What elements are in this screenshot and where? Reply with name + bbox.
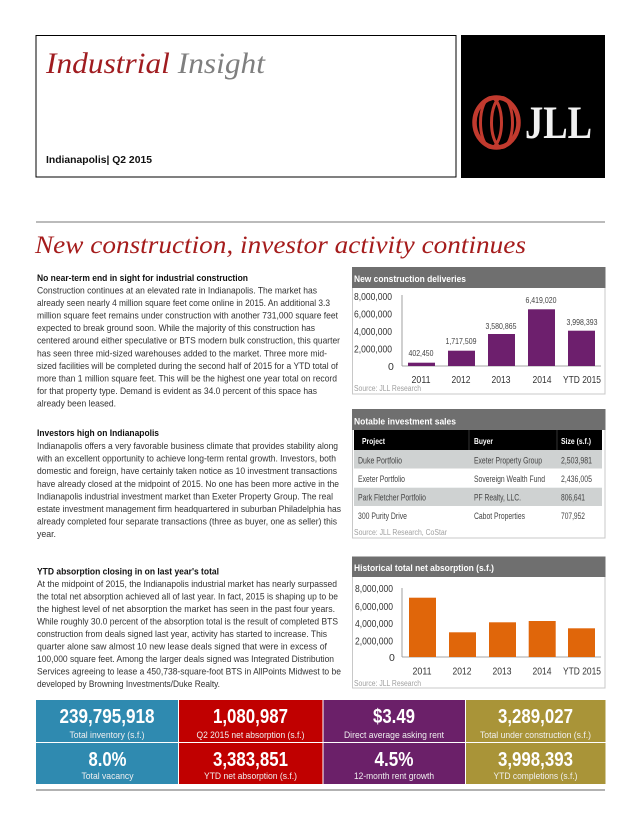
text block: investors: have already closed at the midpoint of 2015. No one has been more active in the [37, 478, 339, 489]
header box [36, 36, 456, 177]
bar chart: deliveries [354, 291, 601, 386]
text block: absorption: YTD absorption closing in on last year's total [37, 566, 219, 576]
stat: under construction: 3,289,027 [498, 706, 573, 728]
text block: investors: estate investment management firm headquartered in suburban Philadelphia has [37, 503, 341, 514]
bar chart: deliveries: 0 [388, 361, 394, 373]
panel: new construction deliveries [352, 267, 606, 394]
stat: YTD net absorption: YTD net absorption (s.f.) [204, 770, 297, 781]
stat: total inventory: 239,795,918 [60, 706, 154, 728]
text block: investors: year. [37, 528, 56, 539]
stat: total inventory [36, 700, 178, 742]
text block: construction: expected to break ground soon. While the majority of this construction has [37, 322, 315, 333]
stat: total inventory: Total inventory (s.f.) [70, 729, 144, 740]
bar chart: deliveries: 4,000,000 [354, 326, 392, 338]
text block: absorption: the highest level of net absorption the market has seen in the past four years. [37, 603, 335, 614]
table: sales: Exeter Property Group [474, 456, 542, 466]
text block: construction: for that property type. Demand is evident as 34.0 percent of this space has [37, 385, 317, 396]
stat: total vacancy: 8.0% [88, 749, 127, 771]
text block: construction: No near-term end in sight for industrial construction [37, 272, 248, 283]
bar chart: absorption: 0 [389, 652, 395, 664]
panel: notable investment sales [352, 409, 606, 538]
bar chart: deliveries: YTD 2015 [563, 374, 601, 386]
bar chart: deliveries: 402,450 [408, 348, 434, 358]
text block: absorption: quarter alone saw almost 10 new lease deals signed that were in excess of [37, 640, 327, 652]
text block: absorption: Services agreeing to lease a 450,738-square-foot BTS in AllPoints Midwest to be [37, 666, 341, 676]
bar chart: deliveries: 6,419,020 [526, 295, 557, 305]
bar chart: deliveries: 2013 [492, 374, 511, 386]
bar chart: deliveries: 2011 [412, 374, 431, 386]
stat: under construction: Total under construction (s.f.) [480, 729, 591, 740]
bar chart: deliveries: 2014 [532, 374, 552, 386]
bar chart: deliveries: 1,717,509 [446, 336, 477, 346]
bar chart: deliveries: 2012 [452, 374, 471, 386]
text block: construction: sized facilities will be completed during the second half of 2015 for a YTD total of [37, 360, 338, 371]
table: sales: 300 Purity Drive [358, 511, 407, 521]
stat: total vacancy: Total vacancy [82, 770, 134, 781]
text block: absorption: At the midpoint of 2015, the Indianapolis industrial market has nearly surpassed [37, 578, 337, 589]
text block: construction: Construction continues at an elevated rate in Indianapolis. The market has [37, 284, 317, 295]
stat: rent growth [324, 743, 465, 784]
bar chart: absorption: 2014 [532, 666, 552, 678]
market and quarter: Indianapolis| Q2 2015 [46, 154, 152, 166]
panel: historical net absorption [352, 556, 606, 688]
panel: historical net absorption: Historical total net absorption (s.f.) [354, 563, 494, 574]
bar chart: absorption: YTD 2015 [563, 666, 601, 678]
stat: YTD completions: YTD completions (s.f.) [494, 770, 578, 781]
text block: construction: million square feet remains under construction with another 731,000 square feet [37, 310, 338, 320]
stat: Q2 net absorption: Q2 2015 net absorption (s.f.) [196, 729, 304, 740]
table: sales [354, 430, 602, 521]
text block: absorption: developed by Browning Investments/Duke Realty. [37, 678, 220, 689]
table: sales: Exeter Portfolio [358, 474, 405, 484]
bar chart: deliveries: 2,000,000 [354, 344, 392, 356]
table: sales: Cabot Properties [474, 511, 525, 521]
table: sales: Duke Portfolio [358, 456, 402, 466]
text block: investors [36, 427, 341, 539]
stat: Q2 net absorption: 1,080,987 [213, 706, 288, 728]
text block: construction: already seen nearly 4 million square feet come online in 2015. An additional 3.3 [37, 297, 330, 308]
bar chart: absorption: 8,000,000 [355, 583, 393, 595]
text block: investors: Indianapolis industrial investment market than Exeter Property Group. The real [37, 490, 333, 501]
table: sales: Park Fletcher Portfolio [358, 492, 426, 502]
report title: Industrial Insight [45, 47, 266, 80]
bar chart: absorption: 2011 [412, 666, 432, 678]
table: sales: Size (s.f.) [561, 436, 591, 446]
panel: new construction deliveries: Source: JLL Research [354, 384, 421, 393]
text block: absorption: construction from deals signed last year, activity has started to increase. This [37, 628, 327, 639]
bar chart: deliveries: 3,580,865 [486, 321, 517, 331]
stat: YTD net absorption: 3,383,851 [213, 749, 288, 771]
stat: YTD completions [466, 743, 606, 784]
stat: asking rent [324, 700, 465, 742]
table: sales: 2,436,005 [561, 474, 592, 484]
bar chart: deliveries: 3,998,393 [566, 317, 598, 327]
stat: YTD completions: 3,998,393 [498, 749, 573, 771]
text block: construction: more than 1 million square feet. This will be the highest one year total on record [37, 372, 337, 384]
stat: asking rent: Direct average asking rent [344, 729, 444, 740]
text block: construction: centered around either speculative or BTS modern bulk construction, this quarter [37, 335, 340, 346]
text block: construction: already been leased. [37, 398, 116, 409]
text block: investors: Indianapolis offers a very favorable business climate that provides stability along [37, 440, 338, 451]
bar chart: absorption: 6,000,000 [355, 601, 393, 613]
stat: YTD net absorption [179, 743, 322, 784]
bar chart: absorption: 2,000,000 [355, 636, 393, 648]
panel: historical net absorption: Source: JLL Research [354, 679, 421, 688]
text block: absorption [37, 566, 341, 689]
stat: under construction [466, 700, 606, 742]
text block: investors: with an excellent opportunity to achieve long-term rental growth. Investors, both [36, 453, 336, 464]
stats grid [36, 700, 606, 784]
main heading: New construction, investor activity continues [34, 232, 526, 259]
bar chart: deliveries: 8,000,000 [354, 291, 392, 303]
stat: Q2 net absorption [179, 700, 322, 742]
stat: total vacancy [36, 743, 178, 784]
text block: investors: domestic and foreign, have certainly taken notice as 10 investment transactions [37, 465, 337, 476]
bar chart: absorption [355, 583, 601, 678]
bar chart: absorption: 2013 [492, 666, 512, 678]
text block: absorption: 100,000 square feet. Among the larger deals signed was Integrated Distribution [37, 653, 334, 664]
table: sales: 707,952 [561, 511, 585, 521]
table: sales: Buyer [474, 436, 494, 446]
table: sales: PF Realty, LLC. [474, 492, 521, 502]
table: sales: 806,641 [561, 492, 585, 502]
bar chart: absorption: 4,000,000 [355, 618, 393, 630]
text block: absorption: the total net absorption achieved all of last year. In fact, 2015 is shaping up to be [37, 590, 338, 602]
text block: investors: already completed four separate transactions (three as buyer, one as seller) this [37, 516, 337, 527]
logo: JLL [461, 35, 605, 178]
panel: notable investment sales: Source: JLL Research, CoStar [354, 528, 447, 537]
text block: construction: has seen three mid-sized warehouses added to the market. Three more mid- [37, 347, 327, 358]
text block: absorption: While roughly 30.0 percent of the absorption total is the result of completed BTS [37, 616, 338, 626]
panel: notable investment sales: Notable investment sales [354, 416, 456, 428]
text block: construction [37, 272, 340, 409]
stat: asking rent: $3.49 [373, 706, 415, 728]
bar chart: deliveries: 6,000,000 [354, 308, 392, 320]
table: sales: Sovereign Wealth Fund [474, 474, 545, 484]
stat: rent growth: 4.5% [374, 749, 414, 771]
table: sales: Project [362, 436, 385, 446]
bar chart: absorption: 2012 [452, 666, 472, 678]
table: sales: 2,503,981 [561, 456, 592, 466]
panel: new construction deliveries: New construction deliveries [354, 274, 466, 285]
logo: JLL: JLL [525, 97, 592, 149]
text block: investors: Investors high on Indianapolis [37, 427, 159, 438]
stat: rent growth: 12-month rent growth [354, 770, 434, 781]
